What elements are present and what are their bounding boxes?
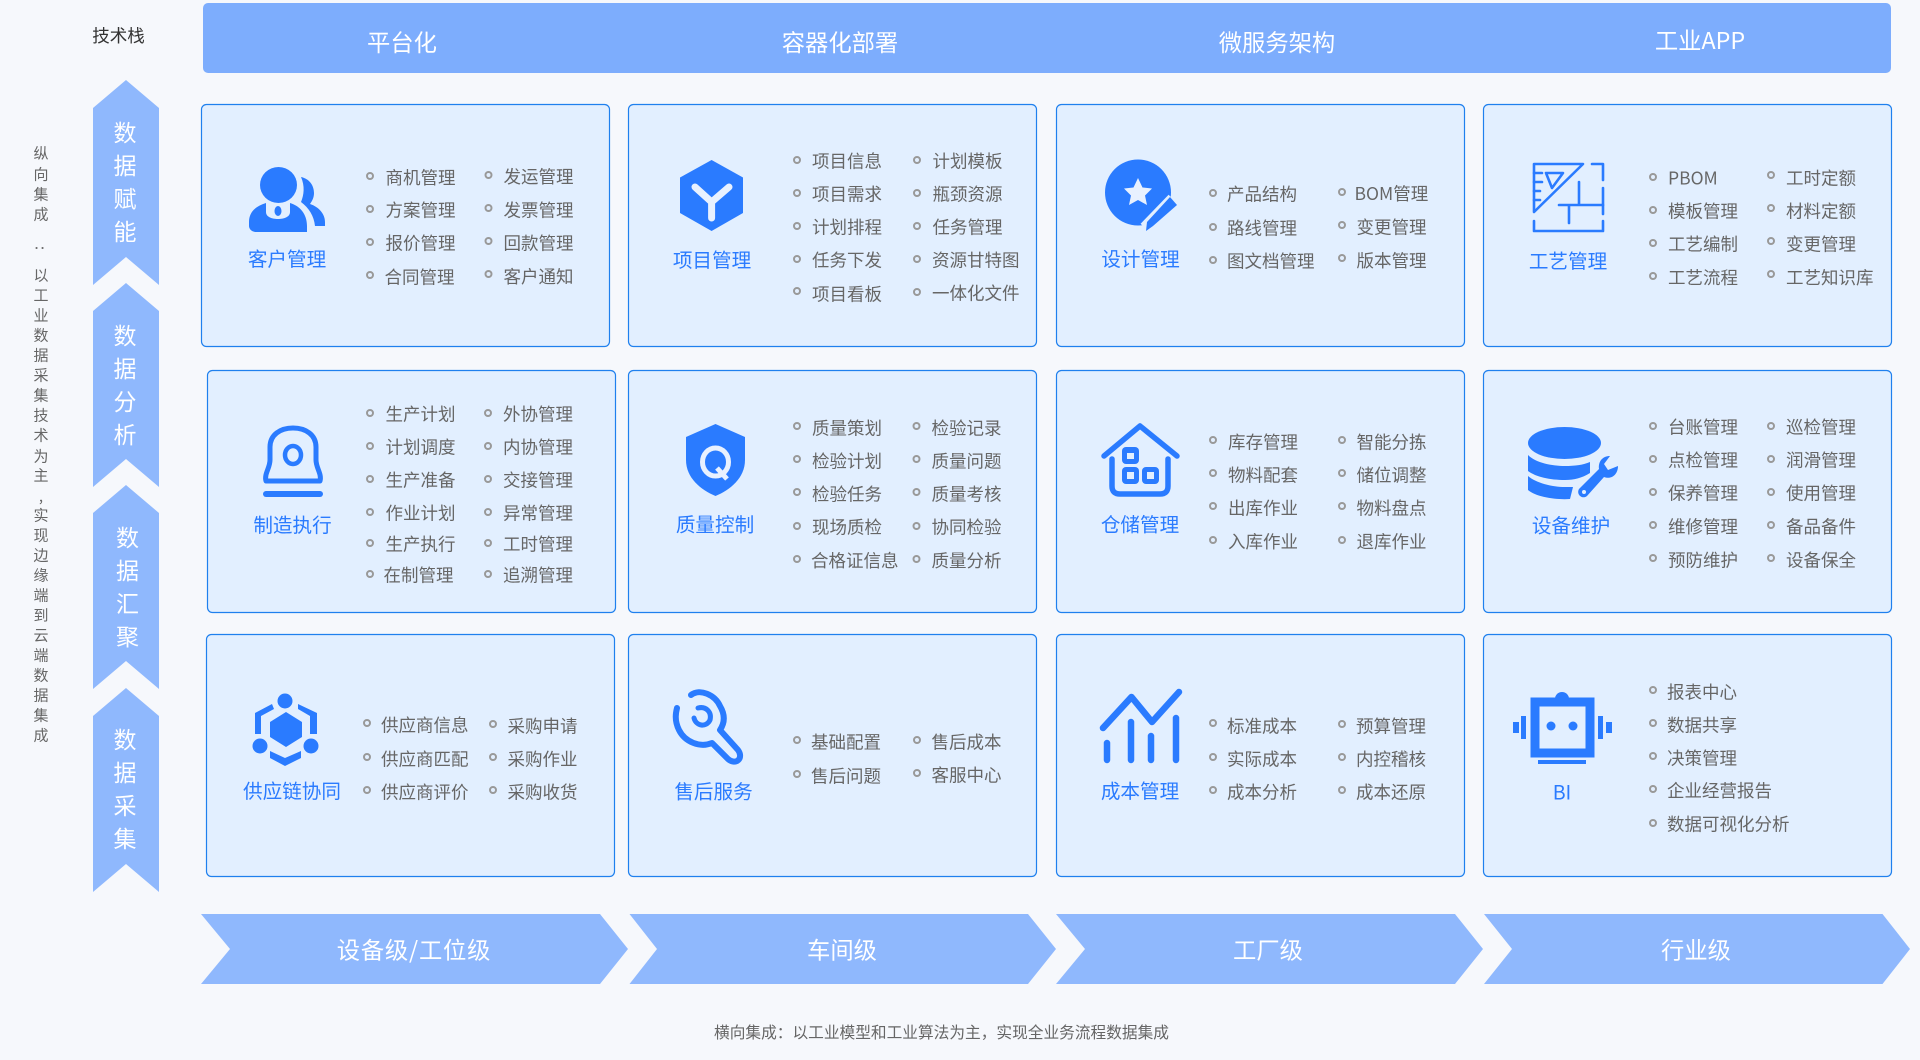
feature list: 供应商信息 bbox=[381, 712, 468, 738]
arrow: 数据汇聚: 聚 bbox=[116, 618, 139, 652]
label: 技术栈: 技术栈 bbox=[92, 23, 145, 48]
feature list: 退库作业 bbox=[1356, 529, 1426, 554]
feature list bbox=[794, 730, 1002, 788]
feature list: 模板管理 bbox=[1668, 198, 1738, 224]
feature list: 追溯管理 bbox=[503, 562, 573, 588]
feature list bbox=[794, 148, 1020, 306]
feature list: 备品备件 bbox=[1786, 514, 1856, 539]
feature list: 采购作业 bbox=[508, 746, 578, 772]
icon: manufacturing alarm bbox=[263, 428, 323, 497]
title: 客户管理 bbox=[248, 243, 326, 272]
horizontal integration note: 横向集成：以工业模型和工业算法为主，实现全业务流程数据集成 bbox=[714, 1020, 1169, 1043]
arrow: 数据采集: 集 bbox=[114, 820, 136, 854]
feature list: 内控稽核 bbox=[1356, 746, 1426, 772]
vertical integration note: 术 bbox=[33, 424, 49, 446]
feature list: 工艺知识库 bbox=[1786, 265, 1874, 290]
feature list: 点检管理 bbox=[1668, 448, 1738, 472]
vertical integration note: 边 bbox=[33, 544, 49, 566]
vertical integration note: 据 bbox=[33, 344, 49, 366]
title: BI bbox=[1553, 777, 1571, 806]
vertical integration note: 为 bbox=[33, 446, 49, 466]
feature list: 物料配套 bbox=[1228, 462, 1298, 488]
vertical integration note: 以 bbox=[33, 264, 49, 286]
feature list: 库存管理 bbox=[1228, 430, 1298, 454]
feature list: 合格证信息 bbox=[811, 548, 898, 573]
feature list: 异常管理 bbox=[503, 500, 573, 526]
vertical integration note: 云 bbox=[33, 624, 49, 646]
feature list: 计划排程 bbox=[812, 214, 882, 240]
chevron: 车间级 bbox=[630, 914, 1056, 984]
title: 制造执行 bbox=[253, 509, 332, 538]
feature list: 生产准备 bbox=[386, 468, 456, 492]
icon: design star and pencil bbox=[1105, 160, 1177, 231]
feature list: 成本还原 bbox=[1356, 780, 1426, 804]
feature list bbox=[1210, 714, 1426, 804]
vertical integration note: 端 bbox=[33, 644, 49, 666]
arrow: 数据采集: 数 bbox=[114, 721, 136, 755]
icon: quality shield bbox=[686, 424, 745, 496]
feature list bbox=[367, 402, 573, 588]
feature list: 质量考核 bbox=[932, 482, 1002, 506]
feature list: 瓶颈资源 bbox=[932, 182, 1002, 206]
feature list: 路线管理 bbox=[1227, 216, 1297, 240]
feature list: 一体化文件 bbox=[932, 280, 1020, 306]
chevron: 工厂级 bbox=[1056, 914, 1483, 984]
arrow: 数据赋能 bbox=[93, 80, 159, 285]
feature list: 工艺流程 bbox=[1668, 265, 1738, 290]
feature list: 项目需求 bbox=[812, 182, 882, 206]
feature list bbox=[1650, 680, 1790, 836]
chevron: 工厂级: 工厂级 bbox=[1233, 932, 1303, 966]
panel: 项目管理 bbox=[628, 104, 1036, 346]
arrow: 数据汇聚: 数 bbox=[116, 519, 139, 553]
feature list bbox=[1210, 181, 1428, 274]
vertical integration note: 现 bbox=[33, 524, 49, 546]
feature list bbox=[1210, 430, 1426, 554]
title: 工艺管理 bbox=[1529, 245, 1607, 274]
arrow: 数据汇聚: 汇 bbox=[116, 585, 139, 619]
panel: 工艺管理 bbox=[1484, 104, 1892, 346]
vertical integration note: 业 bbox=[33, 304, 49, 326]
feature list: 巡检管理 bbox=[1786, 414, 1856, 440]
feature list: 产品结构 bbox=[1227, 182, 1297, 206]
feature list: 出库作业 bbox=[1228, 496, 1298, 520]
vertical integration note bbox=[30, 142, 52, 746]
arrow: 数据赋能: 赋 bbox=[114, 180, 136, 214]
feature list: 发运管理 bbox=[504, 164, 574, 189]
icon: warehouse bbox=[1104, 426, 1177, 494]
feature list: 实际成本 bbox=[1227, 746, 1297, 772]
feature list: 版本管理 bbox=[1356, 248, 1426, 273]
feature list: 成本分析 bbox=[1227, 780, 1297, 804]
feature list: 报价管理 bbox=[386, 230, 456, 256]
vertical integration note: 向 bbox=[33, 164, 49, 184]
vertical integration note: 成 bbox=[33, 724, 49, 746]
icon: database and wrench bbox=[1528, 427, 1618, 499]
vertical integration note: 端 bbox=[33, 584, 49, 606]
feature list: 基础配置 bbox=[811, 730, 881, 754]
title: 设备维护 bbox=[1532, 510, 1610, 539]
feature list: 发票管理 bbox=[504, 198, 574, 222]
arrow: 数据赋能: 数 bbox=[114, 114, 136, 148]
feature list: 质量问题 bbox=[932, 448, 1002, 474]
feature list: 工时定额 bbox=[1786, 166, 1856, 190]
feature list: 台账管理 bbox=[1668, 414, 1738, 440]
panel: 供应链协同 bbox=[206, 634, 614, 876]
feature list: 任务管理 bbox=[932, 214, 1002, 240]
feature list: 生产计划 bbox=[386, 402, 456, 426]
title: 仓储管理 bbox=[1101, 509, 1179, 538]
feature list: 决策管理 bbox=[1667, 746, 1737, 770]
feature list: 图文档管理 bbox=[1227, 248, 1314, 274]
feature list: 任务下发 bbox=[812, 248, 882, 272]
feature list: 预算管理 bbox=[1356, 714, 1426, 738]
vertical integration note: 缘 bbox=[33, 564, 49, 586]
top banner: technology stack: 微服务架构 bbox=[1219, 24, 1335, 58]
vertical integration note: 工 bbox=[33, 284, 49, 306]
vertical integration note: 技 bbox=[33, 404, 49, 426]
feature list: 报表中心 bbox=[1667, 680, 1737, 704]
feature list: 数据共享 bbox=[1667, 712, 1737, 738]
arrow: 数据汇聚: 据 bbox=[116, 552, 139, 586]
vertical integration note: 实 bbox=[33, 504, 49, 526]
feature list: 物料盘点 bbox=[1356, 496, 1426, 520]
feature list bbox=[367, 164, 574, 290]
feature list: 交接管理 bbox=[503, 468, 573, 492]
chevron: 设备级/工位级: 设备级/工位级 bbox=[337, 932, 491, 966]
feature list: 供应商评价 bbox=[381, 780, 468, 804]
chevron: 行业级: 行业级 bbox=[1661, 932, 1731, 966]
arrow: 数据分析: 分 bbox=[114, 383, 136, 417]
title: 质量控制 bbox=[676, 509, 754, 538]
panel: 设计管理 bbox=[1056, 104, 1464, 346]
arrow: 数据赋能: 据 bbox=[114, 147, 136, 181]
panel: 设备维护 bbox=[1484, 370, 1892, 612]
feature list: 采购收货 bbox=[508, 780, 578, 804]
feature list: 协同检验 bbox=[932, 514, 1002, 540]
top banner: technology stack: 平台化 bbox=[367, 24, 437, 58]
arrow: 数据分析: 据 bbox=[114, 350, 136, 384]
vertical integration note: 到 bbox=[33, 604, 49, 626]
panel: 客户管理 bbox=[202, 104, 610, 346]
vertical integration note: 主 bbox=[33, 464, 49, 486]
title: 售后服务 bbox=[674, 776, 753, 805]
vertical integration note: 采 bbox=[33, 364, 49, 386]
title: 供应链协同 bbox=[243, 775, 341, 804]
feature list: 保养管理 bbox=[1668, 480, 1738, 506]
vertical integration note: 集 bbox=[33, 704, 49, 726]
vertical integration note: : bbox=[30, 246, 52, 250]
vertical integration note: 成 bbox=[33, 204, 49, 224]
feature list: 工艺编制 bbox=[1668, 232, 1738, 256]
feature list: 售后成本 bbox=[932, 730, 1002, 754]
feature list: PBOM bbox=[1668, 166, 1718, 190]
icon: supply chain hexagon bbox=[252, 694, 318, 766]
feature list: 在制管理 bbox=[384, 562, 454, 588]
feature list: 方案管理 bbox=[386, 198, 456, 222]
arrow: 数据采集: 据 bbox=[114, 754, 136, 788]
feature list: 检验记录 bbox=[932, 416, 1002, 440]
panel: 仓储管理 bbox=[1056, 370, 1464, 612]
feature list: 合同管理 bbox=[384, 264, 454, 290]
feature list: 项目信息 bbox=[812, 148, 882, 174]
feature list: 预防维护 bbox=[1668, 548, 1738, 572]
title: 成本管理 bbox=[1101, 775, 1179, 804]
vertical integration note: , bbox=[39, 486, 43, 506]
feature list: 工时管理 bbox=[503, 532, 573, 556]
icon: after-sales magnifier bbox=[676, 692, 740, 762]
arrow: 数据汇聚 bbox=[93, 485, 159, 689]
feature list: 设备保全 bbox=[1786, 548, 1856, 572]
panel: BI bbox=[1484, 634, 1892, 876]
panel: 质量控制 bbox=[628, 370, 1036, 612]
arrow: 数据分析 bbox=[93, 283, 159, 487]
arrow: 数据采集 bbox=[93, 688, 159, 892]
feature list: 变更管理 bbox=[1356, 214, 1426, 240]
top banner: technology stack bbox=[203, 3, 1891, 73]
arrow: 数据采集: 采 bbox=[114, 787, 136, 821]
arrow: 数据分析: 数 bbox=[114, 317, 136, 351]
top banner: technology stack: 工业APP bbox=[1655, 22, 1745, 56]
feature list: 质量策划 bbox=[812, 416, 882, 440]
feature list bbox=[794, 416, 1002, 573]
feature list: 客户通知 bbox=[504, 264, 574, 289]
feature list: 资源甘特图 bbox=[932, 248, 1020, 272]
title: 项目管理 bbox=[673, 244, 751, 273]
panel: 售后服务 bbox=[628, 634, 1036, 876]
icon: customers bbox=[249, 167, 325, 232]
chevron: 行业级 bbox=[1484, 914, 1910, 984]
feature list: 入库作业 bbox=[1228, 529, 1298, 554]
feature list bbox=[1650, 166, 1874, 290]
feature list: 外协管理 bbox=[503, 402, 573, 426]
feature list: 内协管理 bbox=[503, 434, 573, 460]
feature list: 材料定额 bbox=[1786, 198, 1856, 224]
feature list: BOM管理 bbox=[1354, 181, 1428, 206]
feature list: 客服中心 bbox=[932, 762, 1002, 788]
feature list: 标准成本 bbox=[1227, 714, 1297, 738]
arrow: 数据分析: 析 bbox=[114, 416, 136, 450]
icon: project cube bbox=[680, 160, 743, 231]
feature list: 检验任务 bbox=[812, 482, 882, 506]
vertical integration note: 数 bbox=[33, 324, 49, 346]
arrow: 数据赋能: 能 bbox=[114, 213, 136, 247]
feature list: 作业计划 bbox=[386, 500, 456, 526]
chevron: 车间级: 车间级 bbox=[807, 932, 877, 966]
feature list bbox=[1650, 414, 1856, 572]
feature list: 企业经营报告 bbox=[1667, 778, 1772, 803]
feature list: 回款管理 bbox=[504, 230, 574, 256]
feature list: 维修管理 bbox=[1668, 514, 1738, 539]
feature list: 现场质检 bbox=[812, 514, 882, 540]
feature list: 生产执行 bbox=[386, 532, 456, 556]
feature list: 智能分拣 bbox=[1356, 430, 1426, 454]
feature list: 计划调度 bbox=[386, 434, 456, 460]
chevron: 设备级/工位级 bbox=[201, 914, 628, 984]
panel: 成本管理 bbox=[1056, 634, 1464, 876]
icon: BI robot bbox=[1513, 692, 1612, 764]
feature list: 检验计划 bbox=[812, 448, 882, 474]
feature list: 变更管理 bbox=[1786, 232, 1856, 256]
feature list: 计划模板 bbox=[932, 148, 1002, 174]
feature list: 数据可视化分析 bbox=[1667, 812, 1790, 836]
top banner: technology stack: 容器化部署 bbox=[782, 24, 898, 58]
vertical integration note: 数 bbox=[33, 664, 49, 686]
panel: 制造执行 bbox=[208, 370, 616, 612]
vertical integration note: 据 bbox=[33, 684, 49, 706]
icon: process blueprint bbox=[1534, 164, 1603, 231]
feature list: 润滑管理 bbox=[1786, 448, 1856, 472]
vertical integration note: 集 bbox=[33, 184, 49, 204]
feature list bbox=[364, 712, 578, 804]
vertical integration note: 集 bbox=[33, 384, 49, 406]
feature list: 使用管理 bbox=[1786, 480, 1856, 506]
feature list: 项目看板 bbox=[812, 282, 882, 306]
feature list: 质量分析 bbox=[932, 548, 1002, 573]
title: 设计管理 bbox=[1101, 243, 1180, 272]
feature list: 采购申请 bbox=[508, 714, 578, 738]
feature list: 储位调整 bbox=[1356, 462, 1426, 488]
feature list: 售后问题 bbox=[811, 764, 881, 788]
feature list: 商机管理 bbox=[386, 165, 456, 190]
icon: cost chart bbox=[1103, 692, 1179, 760]
feature list: 供应商匹配 bbox=[381, 746, 468, 772]
vertical integration note: 纵 bbox=[33, 142, 49, 164]
